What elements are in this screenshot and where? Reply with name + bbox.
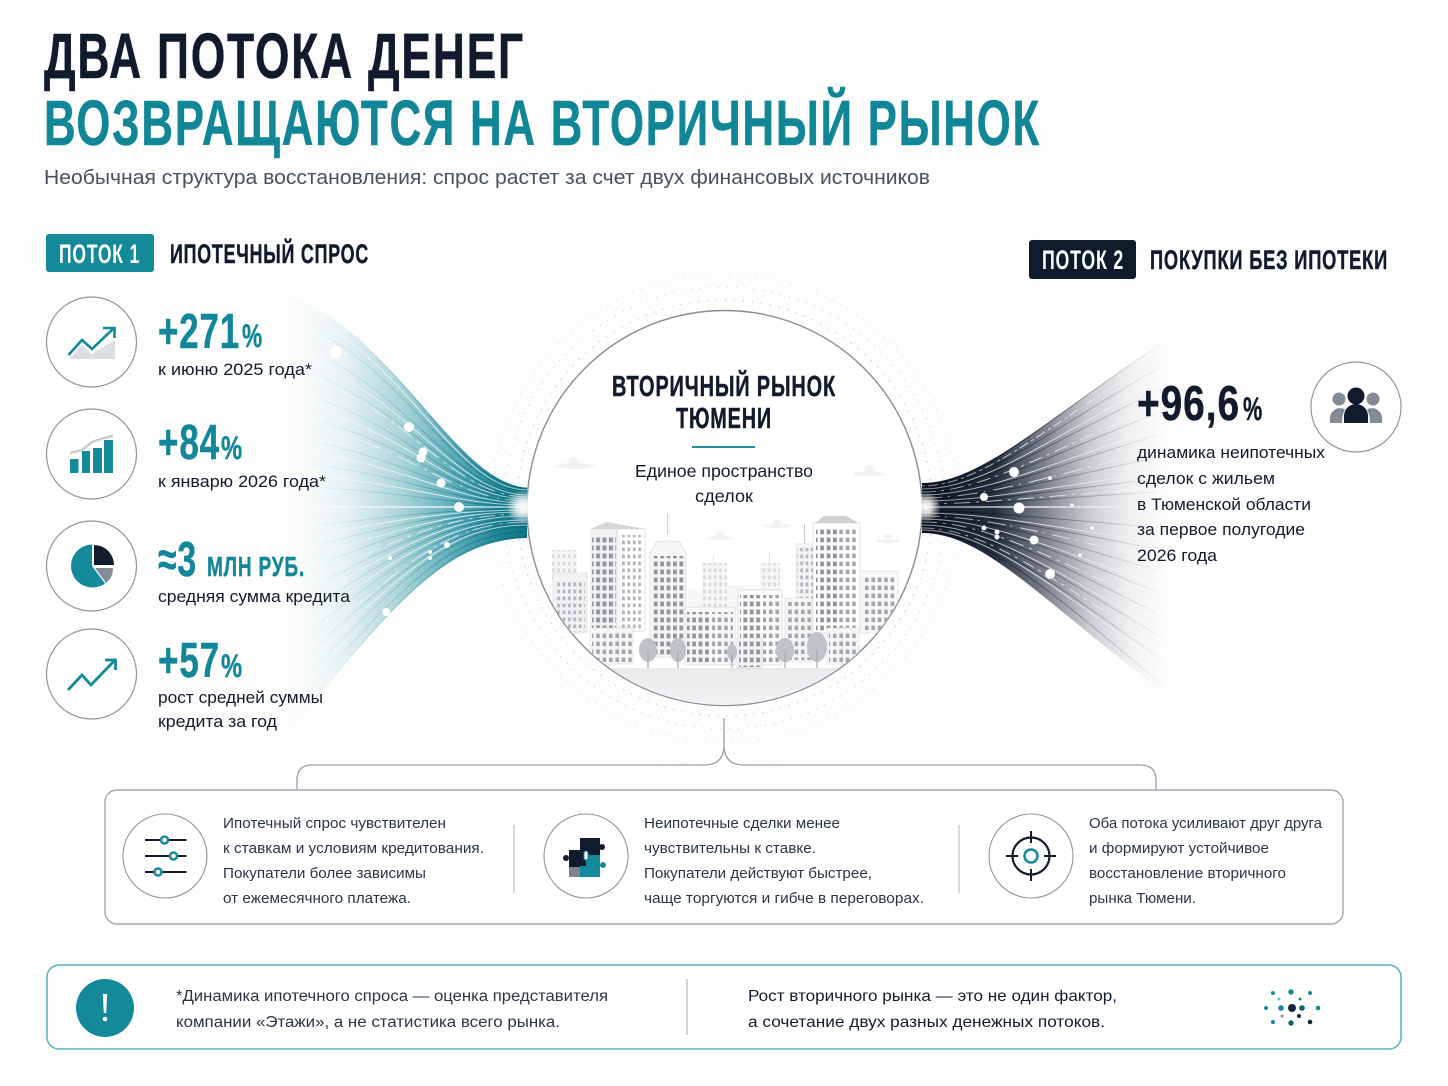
centre heading: ТЮМЕНИ (676, 403, 772, 435)
text: both streams: рынка Тюмени. (1089, 891, 1196, 907)
text: both streams: восстановление вторичного (1089, 866, 1286, 882)
text: non-mortgage deals (644, 816, 924, 907)
centre caption: сделок (695, 486, 753, 506)
stat: +271%: +271 (158, 305, 240, 359)
stat: ≈3 млн руб.: средняя сумма кредита (158, 588, 351, 606)
icon: exclamation (76, 979, 134, 1037)
footnote text: *Динамика ипотечного спроса — оценка представителя (176, 988, 608, 1005)
text: non-mortgage deals: чаще торгуются и гибче в переговорах. (644, 891, 924, 907)
text: both streams: и формируют устойчивое (1089, 841, 1269, 857)
conclusion text: Рост вторичного рынка — это не один фактор, (748, 988, 1117, 1005)
stat: ≈3 млн руб.: ≈3 (158, 533, 197, 587)
stat: +96,6%: +96,6 (1137, 377, 1240, 431)
stream 2 header: ПОТОК 2 (1042, 245, 1124, 275)
text: mortgage sensitivity: Покупатели более зависимы (223, 866, 426, 882)
icon: dots cluster (1264, 989, 1320, 1026)
stat: +96,6%: 2026 года (1137, 546, 1218, 565)
centre heading: ВТОРИЧНЫЙ РЫНОК (612, 369, 836, 403)
footnote text: компании «Этажи», а не статистика всего рынка. (176, 1014, 560, 1031)
back buildings (552, 550, 780, 613)
trees (639, 632, 827, 662)
stream 1 header: ИПОТЕЧНЫЙ СПРОС (170, 238, 369, 269)
title (44, 20, 1041, 159)
text: mortgage sensitivity: Ипотечный спрос чувствителен (223, 816, 446, 832)
stat: +96,6%: динамика неипотечных (1137, 443, 1326, 462)
text: both streams: Оба потока усиливают друг друга (1089, 816, 1323, 832)
text: non-mortgage deals: Покупатели действуют быстрее, (644, 866, 872, 882)
stat: ≈3 млн руб. (46, 521, 351, 611)
city skyline illustration (552, 457, 899, 705)
conclusion text: а сочетание двух разных денежных потоков. (748, 1014, 1105, 1031)
icon: people group (1311, 362, 1401, 452)
stat: +84%: % (221, 430, 243, 466)
stat: +271% (46, 297, 313, 387)
stat: +57%: +57 (158, 634, 220, 688)
stat: +271%: к июню 2025 года* (158, 361, 313, 379)
stat: +96,6%: сделок с жильем (1137, 469, 1275, 488)
stat: +57%: кредита за год (158, 713, 277, 731)
central circle: secondary market (520, 310, 930, 718)
icon: bar chart (46, 409, 136, 499)
dotted rings around centre (466, 249, 984, 767)
centre heading (612, 369, 836, 435)
stat: ≈3 млн руб.: МЛН РУБ. (207, 551, 305, 582)
icon: target (989, 814, 1073, 898)
title: ДВА ПОТОКА ДЕНЕГ (44, 20, 525, 92)
text: non-mortgage deals: чувствительны к ставке. (644, 841, 816, 857)
stat: +84%: +84 (158, 416, 220, 470)
text: mortgage sensitivity: к ставкам и условиям кредитования. (223, 841, 484, 857)
stat: +271%: % (242, 318, 263, 354)
stat: +84% (46, 409, 327, 499)
conclusion text (748, 988, 1117, 1031)
text: both streams (1089, 816, 1323, 907)
text: mortgage sensitivity (223, 816, 484, 907)
stat: +57%: рост средней суммы (158, 689, 323, 707)
footnote text (176, 988, 608, 1031)
right buildings (795, 543, 812, 598)
panel: footnote and conclusion (47, 965, 1401, 1049)
left money stream (265, 285, 527, 742)
text: non-mortgage deals: Неипотечные сделки менее (644, 816, 840, 832)
icon: sliders (123, 814, 207, 898)
stat: +96,6% (1137, 377, 1326, 565)
stat: +84%: к январю 2026 года* (158, 473, 327, 491)
connector bracket (297, 718, 1156, 790)
right money stream (922, 325, 1190, 705)
stream 2 header (1029, 240, 1388, 279)
panel: explanations (105, 790, 1343, 924)
stat: +96,6%: в Тюменской области (1137, 495, 1311, 514)
stream 1 header (46, 234, 369, 272)
middle buildings (685, 607, 735, 665)
stat: +96,6%: за первое полугодие (1137, 520, 1305, 539)
icon: pie chart (46, 521, 136, 611)
stat: +57% (46, 629, 323, 731)
subtitle: Необычная структура восстановления: спрос растет за счет двух финансовых источников (44, 166, 930, 189)
text: mortgage sensitivity: от ежемесячного платежа. (223, 891, 411, 907)
stream 1 header: ПОТОК 1 (59, 239, 140, 269)
stat: +57%: % (221, 648, 243, 684)
centre caption: Единое пространство (635, 461, 813, 481)
icon: growth area chart (46, 297, 136, 387)
left buildings (553, 573, 587, 633)
centre caption (635, 461, 813, 506)
icon: rising arrow (46, 629, 136, 719)
stat: +96,6%: % (1243, 391, 1263, 427)
icon: puzzle (544, 814, 628, 898)
